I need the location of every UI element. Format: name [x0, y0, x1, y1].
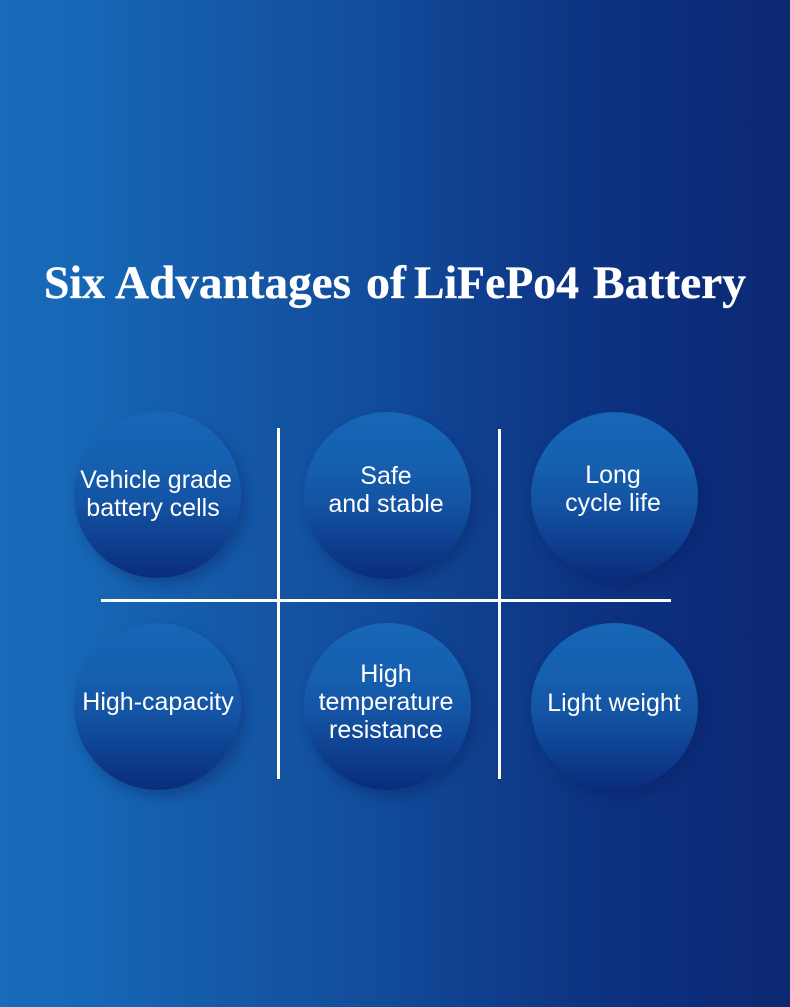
title [44, 257, 747, 309]
label: vehicle grade battery cells, second line: battery cells [86, 494, 220, 522]
label: high temperature resistance: temperature [319, 688, 453, 716]
label: high temperature resistance: resistance [329, 716, 443, 744]
label: high temperature resistance: High [360, 660, 412, 688]
circle: vehicle grade battery cells [74, 411, 241, 578]
circle: long cycle life [531, 412, 698, 579]
title: of [366, 257, 407, 309]
circle: light weight [531, 623, 698, 790]
label: light weight: Light weight [547, 689, 681, 717]
title: Advantages [115, 257, 351, 309]
title: LiFePo4 [414, 257, 579, 309]
label: high temperature resistance [319, 660, 453, 744]
label: long cycle life: Long [585, 461, 641, 489]
label: long cycle life: cycle life [565, 489, 661, 517]
circle: high-capacity [74, 623, 241, 790]
circle: safe and stable [304, 412, 471, 579]
label: long cycle life [565, 461, 661, 517]
label: safe and stable: and stable [328, 490, 444, 518]
title: Six [44, 257, 105, 309]
label: high-capacity: High-capacity [82, 688, 234, 716]
label: safe and stable [328, 462, 444, 518]
label: safe and stable: Safe [360, 462, 412, 490]
title: Battery [593, 257, 747, 309]
circle: high temperature resistance [304, 623, 471, 790]
label: vehicle grade battery cells: Vehicle grade [80, 466, 232, 494]
grid dividers [101, 428, 671, 779]
